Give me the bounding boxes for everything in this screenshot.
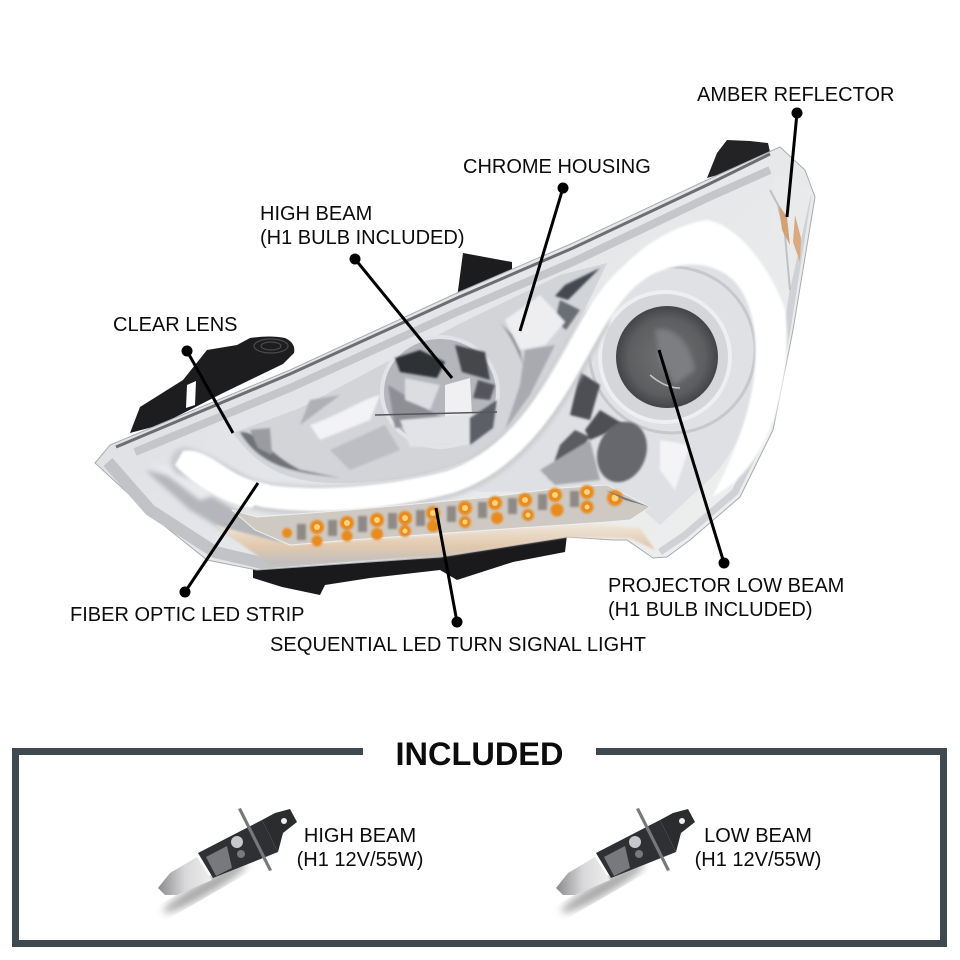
included panel frame [16, 752, 944, 944]
left mounting bracket [130, 336, 294, 433]
callout: turn signal pointer [436, 508, 462, 628]
label: high beam bulb spec: HIGH BEAM [304, 825, 416, 847]
callout: fiber strip pointer [180, 483, 258, 598]
high beam reflector [375, 337, 498, 447]
callout: clear lens pointer [182, 346, 233, 433]
fiber optic LED strip [200, 268, 640, 499]
projector low beam lens [616, 306, 718, 408]
bracket notch [186, 381, 196, 408]
fiber optic strip glow [185, 322, 595, 500]
dark reflector details below projector [540, 372, 690, 490]
callout: chrome housing pointer [520, 182, 568, 331]
lower right compartment [445, 262, 761, 525]
callout: high beam pointer [350, 254, 452, 378]
bottom mounting bracket [253, 535, 567, 595]
LED chrome strip [232, 485, 650, 545]
LED strip speckle [297, 491, 579, 540]
included heading: INCLUDED [396, 736, 563, 772]
LED hot spots [314, 489, 618, 534]
top rim band [135, 170, 770, 452]
label: projector low beam: PROJECTOR LOW BEAM [608, 575, 844, 597]
icon: low beam bulb [556, 808, 695, 918]
label: clear lens: CLEAR LENS [113, 314, 238, 336]
projector ring [600, 292, 730, 422]
lower left inner streaks [145, 462, 290, 545]
callout: amber reflector pointer [787, 108, 802, 217]
LED strip dark end [605, 490, 650, 507]
right rim band [660, 195, 808, 552]
label: sequential LED turn signal: SEQUENTIAL LED TURN SIGNAL LIGHT [270, 634, 646, 656]
label: fiber optic LED strip: FIBER OPTIC LED STRIP [70, 604, 304, 626]
amber reflector [770, 175, 812, 290]
headlight illustration [95, 140, 815, 595]
compartment reflection streaks [240, 268, 600, 478]
top right mounting bracket [707, 140, 770, 178]
label: chrome housing: CHROME HOUSING [463, 156, 651, 178]
fiber strip right arc [618, 220, 787, 497]
chrome housing outer shell [95, 147, 815, 570]
label: high beam bulb spec: (H1 12V/55W) [297, 849, 423, 871]
label: projector low beam: (H1 BULB INCLUDED) [608, 599, 812, 621]
outer lens rim band [108, 462, 440, 563]
label: high beam: HIGH BEAM [260, 203, 372, 225]
secondary small lens [589, 415, 655, 489]
middle mounting bracket [457, 253, 512, 298]
callout: projector pointer [659, 350, 730, 568]
halo ring behind projector [589, 267, 755, 433]
label: high beam: (H1 BULB INCLUDED) [260, 227, 464, 249]
label: low beam bulb spec: LOW BEAM [704, 825, 812, 847]
label: low beam bulb spec: (H1 12V/55W) [695, 849, 821, 871]
fiber strip left blob [175, 451, 270, 508]
callout lines and dots [180, 108, 802, 628]
icon: high beam bulb [158, 808, 297, 918]
bracket screw rings [254, 339, 288, 353]
peach reflection band [215, 522, 655, 565]
dark upper edge of lens [116, 154, 770, 447]
upper compartment [233, 263, 607, 483]
LED turn signal lights [282, 485, 623, 546]
label: amber reflector: AMBER REFLECTOR [697, 84, 894, 106]
